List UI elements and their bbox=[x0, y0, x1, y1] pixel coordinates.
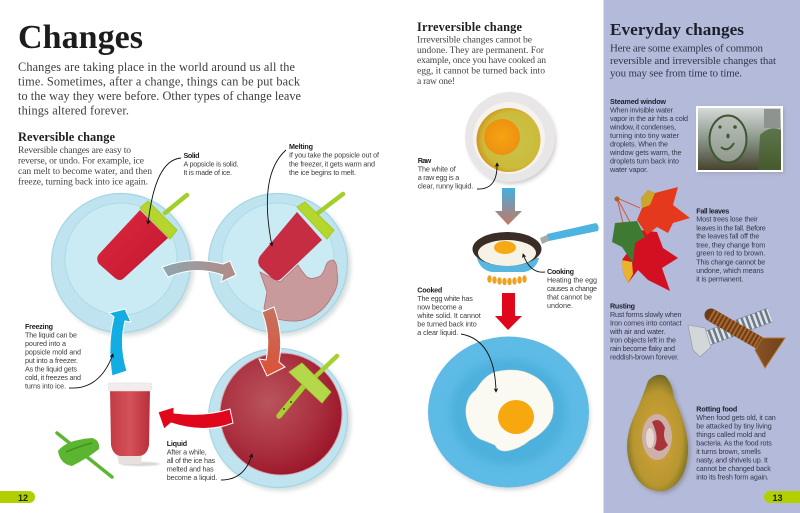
photo: steamed window with smiley bbox=[696, 106, 784, 173]
callout: melting: the freezer, it gets warm and bbox=[289, 159, 375, 168]
callout: freezing: poured into a bbox=[25, 339, 66, 348]
callout: cooked bbox=[416, 285, 496, 392]
text: everyday changes intro: Here are some examples of common bbox=[610, 43, 764, 55]
text: irreversible change description: example, once you have cooked an bbox=[417, 55, 546, 66]
callout: cooked: now become a bbox=[417, 302, 462, 312]
callout: rusting: Rust forms slowly when bbox=[610, 310, 682, 319]
callout: steamed window: droplets. When the bbox=[610, 140, 668, 149]
page number 12 bbox=[0, 491, 35, 503]
callout: steamed window: Steamed window bbox=[610, 97, 666, 106]
callout: fall leaves: Most trees lose their bbox=[696, 215, 758, 224]
callout: cooking: that cannot be bbox=[547, 292, 592, 302]
callout: rotting food: bacteria. As the food rots bbox=[696, 439, 772, 448]
callout: steamed window: water vapor. bbox=[609, 165, 648, 174]
plate: melting popsicle bbox=[208, 194, 351, 336]
callout: rotting food: it turns brown, smells bbox=[696, 447, 761, 456]
text: reversible change description: reverse, or undo. For example, ice bbox=[18, 156, 144, 166]
arrow: cooking to cooked bbox=[495, 293, 522, 330]
callout: steamed window: When invisible water bbox=[610, 106, 674, 115]
callout: melting: the ice begins to melt. bbox=[289, 168, 356, 177]
callout: cooked: The egg white has bbox=[417, 294, 473, 303]
panel: everyday changes background bbox=[604, 0, 800, 513]
text: reversible change description: can melt to become water, and then bbox=[18, 166, 152, 177]
callout: raw: Raw bbox=[418, 156, 432, 165]
callout: rusting: with air and water. bbox=[609, 327, 666, 336]
callout: cooked: be turned back into bbox=[417, 320, 477, 328]
callout: melting: If you take the popsicle out of bbox=[289, 151, 379, 160]
callout: raw: The white of bbox=[418, 165, 456, 174]
heading: everyday changes: Everyday changes bbox=[610, 20, 744, 39]
text: reversible change description: freeze, turning back into ice again. bbox=[18, 176, 148, 188]
callout: fall leaves: leaves in the fall. Before bbox=[696, 223, 766, 232]
page number 13: 13 bbox=[772, 493, 782, 503]
icon: fall leaves bbox=[612, 187, 690, 291]
callout: freezing: turns into ice. bbox=[25, 382, 66, 390]
callout: solid: It is made of ice. bbox=[184, 168, 232, 177]
callout: steamed window bbox=[609, 97, 688, 174]
callout: fall leaves bbox=[696, 206, 766, 283]
callout: fall leaves: This change cannot be bbox=[696, 257, 765, 266]
icon: raw egg in bowl bbox=[465, 92, 556, 184]
callout: rotting food: things called mold and bbox=[696, 430, 766, 439]
callout: fall leaves: the leaves fall off the bbox=[696, 232, 759, 241]
callout: cooking: Cooking bbox=[547, 267, 574, 276]
callout: cooked: a clear liquid. bbox=[417, 328, 458, 337]
text: irreversible change description: Irreversible changes cannot be bbox=[417, 34, 532, 46]
icon: rusty and shiny bolts bbox=[688, 315, 785, 368]
arrow: raw to cooking bbox=[495, 188, 522, 225]
icon: popsicle mold cup bbox=[108, 383, 160, 466]
callout: rusting: reddish-brown forever. bbox=[610, 353, 679, 362]
callout: cooking: undone. bbox=[547, 301, 573, 310]
intro text: to the way they were before. Other types of change leave bbox=[18, 89, 302, 103]
callout: rotting food: nasty, and shrivels up. It bbox=[696, 456, 768, 465]
callout: raw: clear, runny liquid. bbox=[418, 182, 473, 190]
callout: fall leaves: Fall leaves bbox=[696, 206, 729, 215]
arrow: solid to melting bbox=[162, 261, 236, 282]
plate: solid popsicle bbox=[52, 194, 194, 336]
callout: liquid: After a while, bbox=[167, 448, 207, 456]
callout: cooking: causes a change bbox=[547, 284, 597, 293]
melted liquid pool bbox=[260, 260, 338, 321]
intro text: Changes are taking place in the world around us all the bbox=[18, 60, 296, 74]
text: irreversible change description: a raw one! bbox=[417, 76, 455, 87]
text: irreversible change description: undone. They are permanent. For bbox=[417, 45, 545, 56]
callout: rotting food: Rotting food bbox=[696, 405, 737, 414]
callout: fall leaves: undone, which means bbox=[696, 266, 764, 275]
callout: steamed window: vapor in the air hits a cold bbox=[610, 114, 688, 123]
text: everyday changes intro bbox=[610, 43, 776, 80]
callout: cooked: Cooked bbox=[417, 285, 442, 294]
plate: liquid bbox=[208, 348, 351, 491]
callout: liquid: become a liquid. bbox=[167, 473, 217, 482]
callout: freezing: cold, it freezes and bbox=[25, 373, 81, 382]
heading: irreversible change: Irreversible change bbox=[417, 20, 522, 34]
text: reversible change description bbox=[18, 145, 152, 188]
arrow: freezing bbox=[109, 309, 131, 376]
intro text bbox=[18, 60, 302, 118]
callout: freezing: As the liquid gets bbox=[25, 364, 77, 374]
callout: steamed window: droplets turn back into bbox=[610, 157, 679, 166]
icon: melting popsicle bbox=[258, 194, 343, 280]
icon: rotting avocado bbox=[627, 375, 690, 493]
callout: rotting food: be attacked by tiny living bbox=[696, 422, 772, 431]
callout: steamed window: window gets warm, the bbox=[609, 148, 682, 157]
callout: fall leaves: it is permanent. bbox=[696, 274, 743, 283]
icon: popsicle stick floating bbox=[279, 356, 337, 416]
arrow: liquid to mold bbox=[158, 407, 233, 429]
text: reversible change description: Reversible changes are easy to bbox=[18, 145, 131, 156]
callout: cooked: white solid. It cannot bbox=[416, 311, 481, 320]
callout: cooking bbox=[523, 254, 597, 310]
text: irreversible change description bbox=[417, 34, 546, 87]
icon: popsicle lid and stick bbox=[57, 433, 112, 477]
callout: rotting food bbox=[696, 405, 776, 482]
text: everyday changes intro: reversible and irreversible changes that bbox=[610, 55, 776, 67]
callout: steamed window: window, it condenses, bbox=[609, 123, 676, 132]
intro text: time. Sometimes, after a change, things can be put back bbox=[18, 74, 301, 88]
callout: melting bbox=[267, 142, 379, 246]
callout: rotting food: When food gets old, it can bbox=[696, 413, 776, 422]
page number 13 bbox=[764, 491, 800, 503]
callout: fall leaves: green to red to brown. bbox=[696, 249, 765, 258]
callout: liquid: all of the ice has bbox=[167, 456, 216, 465]
icon: solid popsicle bbox=[97, 195, 187, 280]
callout: cooking: Heating the egg bbox=[547, 276, 597, 284]
page number 12: 12 bbox=[18, 493, 28, 503]
callout: rusting: Iron objects left in the bbox=[610, 336, 676, 345]
icon: flames bbox=[487, 275, 527, 285]
callout: fall leaves: tree, they change from bbox=[696, 240, 765, 249]
callout: rotting food: into its fresh form again. bbox=[696, 473, 769, 482]
callout: liquid: melted and has bbox=[167, 464, 214, 474]
callout: liquid bbox=[167, 439, 252, 482]
callout: solid: Solid bbox=[184, 151, 200, 160]
callout: solid bbox=[148, 151, 238, 224]
title: Changes bbox=[18, 19, 143, 56]
text: irreversible change description: egg, it cannot be turned back into bbox=[417, 66, 545, 77]
callout: freezing: The liquid can be bbox=[25, 330, 77, 340]
arrow: melting to liquid bbox=[259, 307, 285, 376]
callout: rotting food: cannot be changed back bbox=[696, 464, 771, 473]
callout: solid: A popsicle is solid. bbox=[184, 160, 238, 168]
callout: rusting: rain become flaky and bbox=[610, 344, 675, 353]
callout: raw bbox=[418, 156, 497, 190]
callout: rusting: Rusting bbox=[610, 302, 635, 311]
text: everyday changes intro: you may see from time to time. bbox=[610, 68, 742, 80]
callout: freezing: Freezing bbox=[25, 322, 53, 331]
heading: reversible change: Reversible change bbox=[18, 130, 116, 144]
icon: fried egg on blue plate bbox=[428, 336, 590, 490]
callout: liquid: Liquid bbox=[167, 439, 187, 448]
callout: rusting: Iron comes into contact bbox=[610, 319, 682, 328]
callout: rusting bbox=[609, 302, 682, 362]
callout: steamed window: turning into tiny water bbox=[610, 131, 680, 140]
callout: freezing: put into a freezer. bbox=[25, 356, 78, 365]
intro text: things altered forever. bbox=[18, 104, 129, 118]
icon: frying pan with egg bbox=[472, 223, 599, 272]
callout: freezing bbox=[25, 322, 113, 390]
callout: melting: Melting bbox=[289, 142, 313, 151]
callout: raw: a raw egg is a bbox=[418, 173, 459, 182]
callout: freezing: popsicle mold and bbox=[25, 348, 81, 356]
